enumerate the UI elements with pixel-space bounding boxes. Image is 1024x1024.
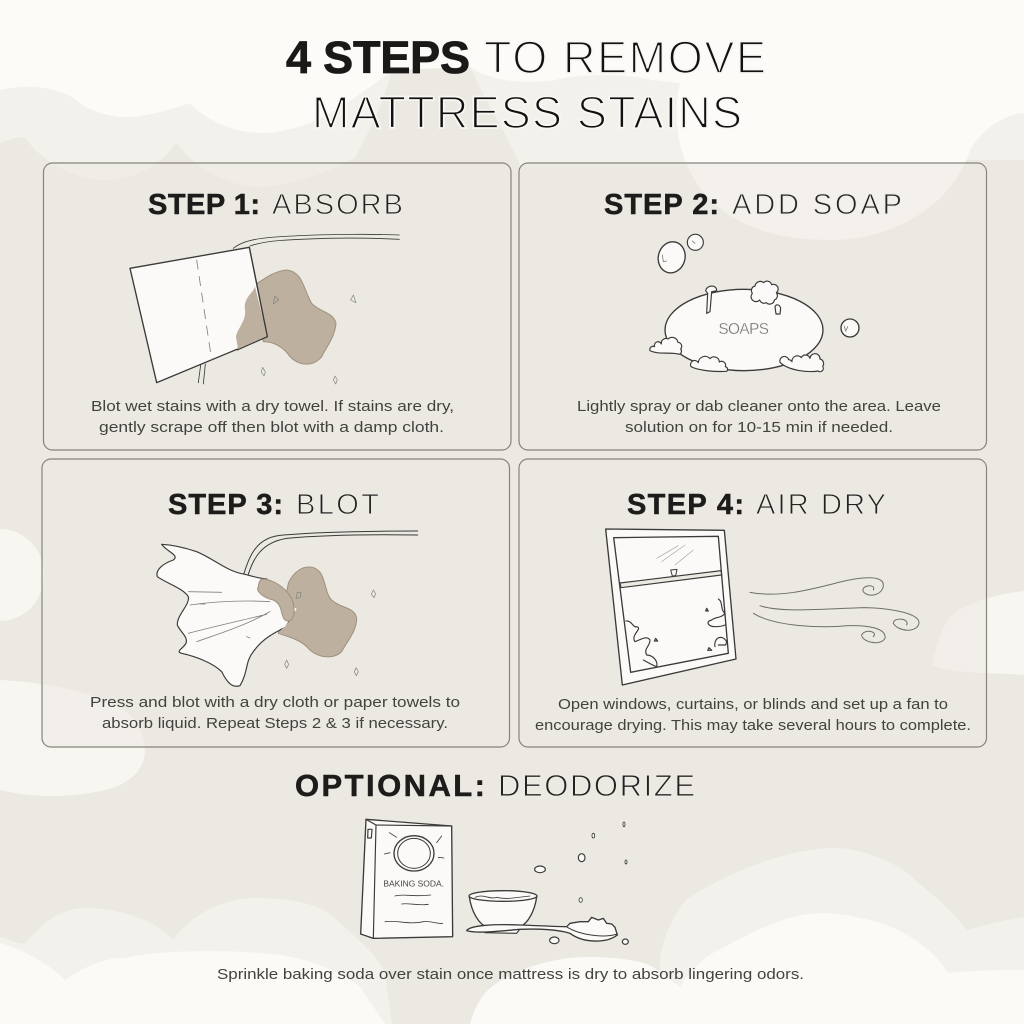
heading: step 2: ADD SOAP — [732, 189, 902, 221]
panel: step 4 air dry — [519, 459, 986, 747]
description: step 4: encourage drying. This may take several hours to complete. — [535, 717, 971, 734]
heading: step 4: STEP 4: — [627, 489, 744, 521]
description: step 2: solution on for 10-15 min if needed. — [625, 419, 893, 436]
description: step 3 — [90, 694, 460, 732]
description: step 4: Open windows, curtains, or blinds and set up a fan to — [558, 696, 948, 713]
title: TO REMOVE — [484, 32, 766, 83]
heading: optional deodorize — [295, 768, 695, 803]
soap label: SOAPS — [718, 321, 769, 338]
description: step 3: Press and blot with a dry cloth or paper towels to — [90, 694, 460, 711]
heading: step 3: STEP 3: — [168, 489, 283, 521]
icon: baking soda box: BAKING SODA. — [383, 880, 444, 889]
illustration: cloth pressing stain — [157, 531, 418, 686]
panel: step 1 absorb — [44, 163, 511, 450]
icon: baking soda box — [361, 819, 453, 938]
heading: step 3 — [168, 489, 379, 521]
illustration: towel blotting stain — [130, 234, 399, 384]
icon: bowl and spoon — [467, 891, 617, 941]
description: step 1: Blot wet stains with a dry towel. If stains are dry, — [91, 398, 454, 415]
heading: optional deodorize: DEODORIZE — [498, 768, 695, 803]
heading: step 1 — [148, 189, 403, 221]
description: step 2 — [577, 398, 941, 436]
heading: step 4 — [627, 489, 886, 521]
panel: step 2 add soap — [519, 163, 986, 450]
description: step 1 — [91, 398, 454, 436]
icon: baking soda specks — [535, 822, 628, 944]
illustration: baking soda box, bowl and spoon — [361, 819, 628, 944]
heading: step 2 — [604, 189, 902, 221]
description: step 3: absorb liquid. Repeat Steps 2 & 3 if necessary. — [102, 715, 448, 732]
description: step 1: gently scrape off then blot with a damp cloth. — [99, 419, 444, 436]
description: step 4 — [535, 696, 971, 734]
heading: step 1: ABSORB — [272, 189, 403, 221]
description: step 2: Lightly spray or dab cleaner onto the area. Leave — [577, 398, 941, 415]
heading: optional deodorize: OPTIONAL: — [295, 768, 485, 803]
panel: step 3 blot — [42, 459, 510, 747]
heading: step 2: STEP 2: — [604, 189, 719, 221]
illustration: open window with breeze — [606, 529, 919, 685]
heading: step 4: AIR DRY — [756, 489, 886, 521]
heading: step 3: BLOT — [296, 489, 379, 521]
title: MATTRESS STAINS — [312, 87, 742, 138]
title — [286, 32, 766, 138]
description: optional: Sprinkle baking soda over stain once mattress is dry to absorb lingering odors. — [217, 966, 804, 983]
illustration: soap bar with bubbles — [650, 234, 859, 372]
heading: step 1: STEP 1: — [148, 189, 260, 221]
title: 4 STEPS — [286, 32, 470, 83]
